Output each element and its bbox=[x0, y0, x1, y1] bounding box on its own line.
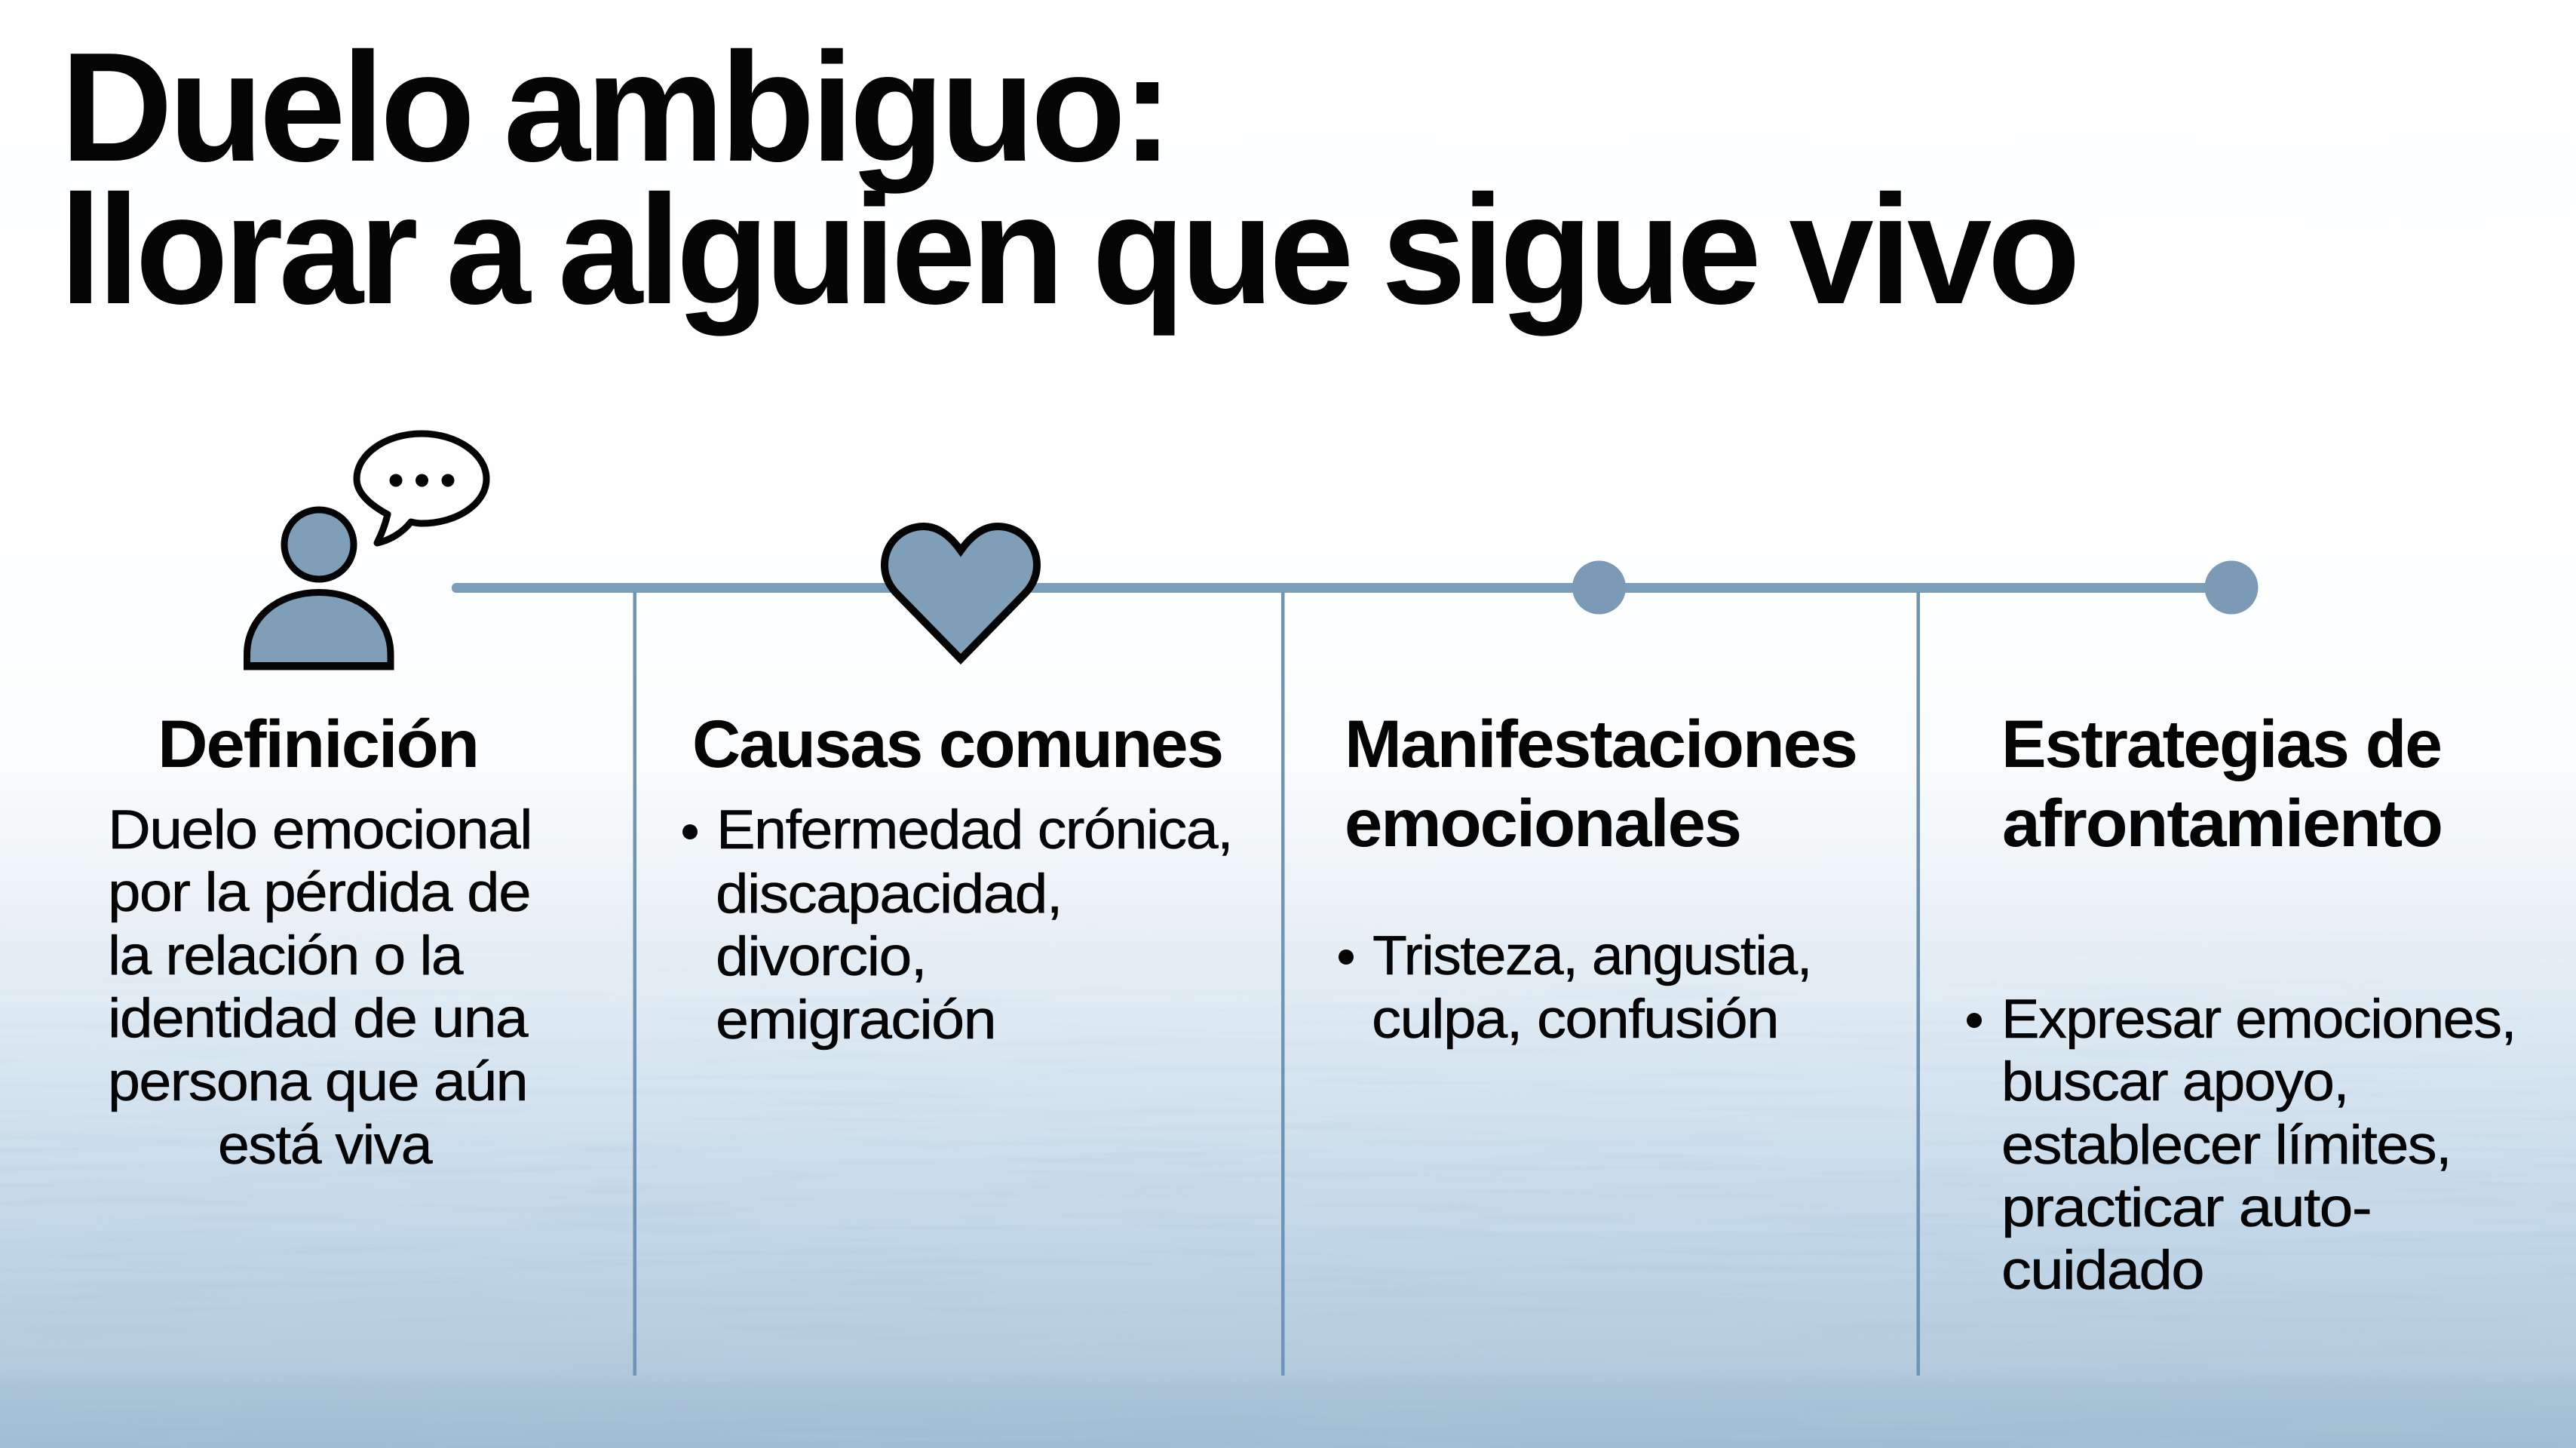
text: estrategias body: Expresar emociones, bbox=[2001, 989, 2516, 1050]
text: definicion body: Duelo emocional bbox=[108, 799, 532, 861]
node: circle 3 bbox=[1572, 561, 1626, 614]
node: circle 4 bbox=[2205, 561, 2258, 614]
heading: estrategias de afrontamiento bbox=[2001, 706, 2442, 861]
panel: definicion bbox=[108, 706, 532, 1176]
heading: estrategias de afrontamiento: afrontamiento bbox=[2002, 785, 2442, 861]
text: causas body: discapacidad, bbox=[716, 864, 1062, 925]
text: estrategias body bbox=[2001, 989, 2516, 1301]
text: causas body: divorcio, bbox=[716, 926, 926, 987]
text: manifestaciones body: Tristeza, angustia, bbox=[1372, 925, 1811, 986]
icon: person with speech bubble bbox=[244, 434, 486, 670]
text: estrategias body: cuidado bbox=[2001, 1240, 2203, 1301]
panel: causas comunes bbox=[682, 706, 1232, 1051]
heading: causas comunes: Causas comunes bbox=[692, 706, 1222, 781]
panel: estrategias de afrontamiento bbox=[1967, 706, 2516, 1301]
text: estrategias body: practicar auto- bbox=[2001, 1177, 2371, 1238]
text: causas body: Enfermedad crónica, bbox=[716, 799, 1232, 861]
column divider 3 bbox=[1917, 592, 1920, 1376]
text: definicion body: identidad de una bbox=[108, 988, 529, 1049]
column divider 2 bbox=[1281, 592, 1285, 1376]
panel: manifestaciones emocionales bbox=[1339, 706, 1857, 1050]
text: estrategias body: buscar apoyo, bbox=[2001, 1051, 2348, 1112]
text: manifestaciones body: culpa, confusión bbox=[1372, 989, 1778, 1050]
title: llorar a alguien que sigue vivo bbox=[60, 163, 2076, 336]
text: definicion body: persona que aún bbox=[108, 1051, 527, 1112]
heading: definicion: Definición bbox=[158, 706, 478, 781]
text: definicion body: está viva bbox=[218, 1115, 433, 1176]
heading: manifestaciones emocionales: Manifestaciones bbox=[1345, 706, 1857, 781]
heading: manifestaciones emocionales: emocionales bbox=[1345, 785, 1740, 861]
bullet bbox=[1339, 949, 1354, 965]
bullet bbox=[1967, 1013, 1982, 1028]
text: definicion body: la relación o la bbox=[108, 925, 464, 986]
title: Duelo ambiguo: bbox=[60, 20, 1169, 194]
heading: estrategias de afrontamiento: Estrategias de bbox=[2001, 706, 2441, 781]
text: manifestaciones body bbox=[1372, 925, 1811, 1050]
text: definicion body bbox=[108, 799, 532, 1176]
icon: heart bbox=[885, 526, 1037, 659]
text: definicion body: por la pérdida de bbox=[108, 862, 530, 923]
column divider 1 bbox=[633, 592, 636, 1376]
bullet bbox=[682, 824, 698, 839]
title bbox=[60, 20, 2076, 336]
text: estrategias body: establecer límites, bbox=[2001, 1115, 2451, 1176]
text: causas body bbox=[716, 799, 1232, 1051]
heading: manifestaciones emocionales bbox=[1345, 706, 1857, 861]
background: misty water gradient bbox=[0, 790, 2576, 1448]
timeline horizontal bar bbox=[452, 583, 2231, 593]
text: causas body: emigración bbox=[716, 989, 995, 1051]
